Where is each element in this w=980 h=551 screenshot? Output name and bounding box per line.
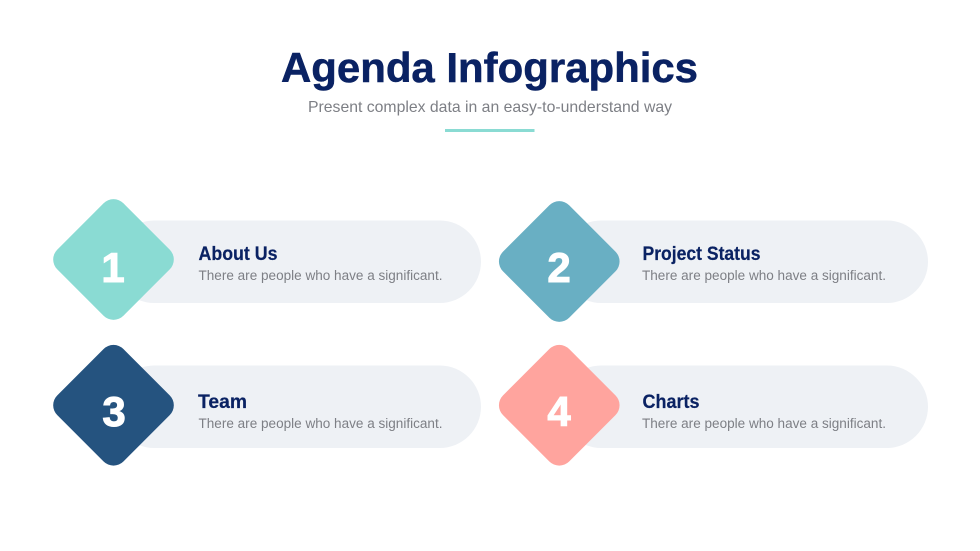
heading 2: Project Status <box>642 244 760 265</box>
pill panel 3 <box>113 366 481 448</box>
description 4: There are people who have a significant. <box>642 416 886 431</box>
heading 3: Team <box>198 392 247 413</box>
title: Agenda Infographics <box>281 44 698 91</box>
heading 4: Charts <box>642 392 700 413</box>
pill panel 2 <box>560 220 928 303</box>
agenda item 4: Charts <box>493 339 928 471</box>
number 2: 2 <box>547 244 571 291</box>
description 1: There are people who have a significant. <box>198 268 442 283</box>
pill panel 1 <box>113 220 481 303</box>
number 3: 3 <box>102 388 126 435</box>
agenda item 2: Project Status <box>493 195 928 328</box>
description 2: There are people who have a significant. <box>642 268 886 283</box>
agenda item 1: About Us <box>47 193 481 326</box>
pill panel 4 <box>560 366 928 448</box>
diamond 1 <box>47 193 180 326</box>
diamond 2 <box>493 195 625 328</box>
subtitle: Present complex data in an easy-to-understand way <box>308 99 672 116</box>
diamond 3 <box>47 339 180 471</box>
heading 1: About Us <box>198 244 278 265</box>
agenda item 3: Team <box>47 339 481 471</box>
description 3: There are people who have a significant. <box>198 416 442 431</box>
number 1: 1 <box>101 244 125 291</box>
number 4: 4 <box>547 388 571 435</box>
title accent line <box>445 129 534 132</box>
diamond 4 <box>493 339 625 471</box>
